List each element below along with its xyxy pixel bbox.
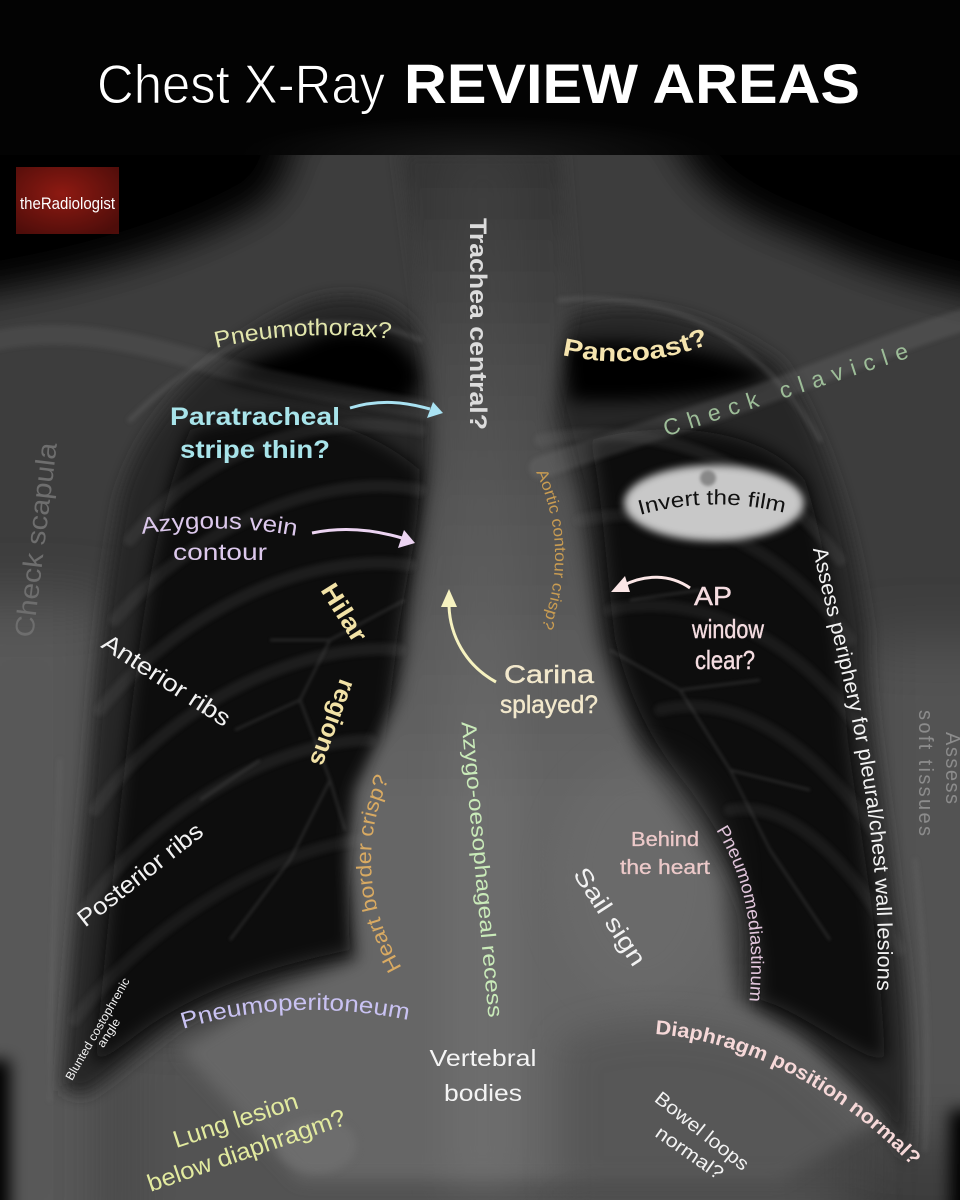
label: hilar regions: Hilar	[315, 578, 373, 648]
label: Pancoast: Pancoast?	[564, 330, 704, 362]
label: assess soft tissues	[914, 710, 960, 836]
label: paratracheal stripe: stripe thin?	[180, 436, 330, 464]
label: AP window: clear?	[695, 645, 755, 675]
label: sail sign: Sail sign	[567, 863, 651, 971]
label: paratracheal stripe	[170, 403, 340, 464]
label: diaphragm position: Diaphragm position normal?	[656, 1020, 920, 1162]
label: azygous vein	[142, 516, 296, 565]
title: REVIEW AREAS	[404, 52, 860, 115]
label: heart border: Heart border crisp?	[356, 774, 401, 973]
header band	[0, 0, 960, 155]
label: behind the heart	[620, 829, 710, 879]
label: vertebral bodies: bodies	[444, 1080, 522, 1106]
arrow: carina	[441, 589, 496, 682]
logo: theRadiologist	[16, 167, 119, 234]
label: hilar regions	[304, 578, 373, 770]
label: behind the heart: Behind	[631, 829, 699, 851]
title	[97, 52, 860, 115]
label: blunted costophrenic angle: Blunted costophrenic	[62, 975, 133, 1083]
label: assess soft tissues: soft tissues	[914, 710, 936, 836]
label: azygo-oesophageal recess: Azygo-oesophageal recess	[457, 720, 506, 1018]
arrow: AP window	[611, 576, 690, 592]
label: azygous vein: Azygous vein	[142, 516, 296, 536]
label: check clavicle: Check clavicle	[660, 337, 911, 441]
label: anterior ribs: Anterior ribs	[97, 629, 235, 732]
label: carina splayed: Carina	[504, 661, 594, 689]
label: trachea central: Trachea central?	[464, 218, 491, 430]
label: check scapula: Check scapula	[9, 440, 63, 639]
label: behind the heart: the heart	[620, 857, 710, 879]
label: posterior ribs: Posterior ribs	[72, 818, 209, 933]
label: vertebral bodies: Vertebral	[430, 1045, 536, 1071]
label: aortic contour: Aortic contour crisp?	[536, 472, 566, 630]
label: azygous vein: contour	[173, 539, 267, 565]
label: AP window: window	[691, 614, 764, 644]
label: lung lesion below diaphragm: below diaphragm?	[144, 1104, 349, 1198]
bright blob: invert the film	[618, 459, 810, 547]
label: pneumomediastinum: Pneumomediastinum	[717, 825, 764, 1001]
label: bowel loops: Bowel loops	[650, 1088, 753, 1175]
label: carina splayed: splayed?	[500, 691, 598, 719]
label: AP window: AP	[694, 581, 732, 611]
label: paratracheal stripe: Paratracheal	[170, 403, 340, 431]
label: blunted costophrenic angle: angle	[94, 1015, 123, 1050]
label: vertebral bodies	[430, 1045, 536, 1106]
label: hilar regions: regions	[304, 676, 361, 770]
label: bowel loops: normal?	[651, 1123, 727, 1184]
label: pneumothorax: Pneumothorax?	[214, 318, 392, 348]
label: carina splayed	[500, 661, 598, 719]
label: pneumoperitoneum: Pneumoperitoneum	[180, 993, 408, 1028]
label: lung lesion below diaphragm: Lung lesion	[170, 1088, 302, 1154]
logo: theRadiologist: theRadiologist	[20, 194, 115, 213]
label: assess periphery: Assess periphery for pleural/chest wall lesions	[812, 548, 893, 990]
label: AP window	[691, 581, 764, 675]
arrow: paratracheal	[350, 402, 443, 418]
arrow: azygous	[312, 529, 415, 548]
bright blob: invert the film: Invert the film	[638, 489, 784, 514]
title: Chest X-Ray	[97, 53, 385, 115]
